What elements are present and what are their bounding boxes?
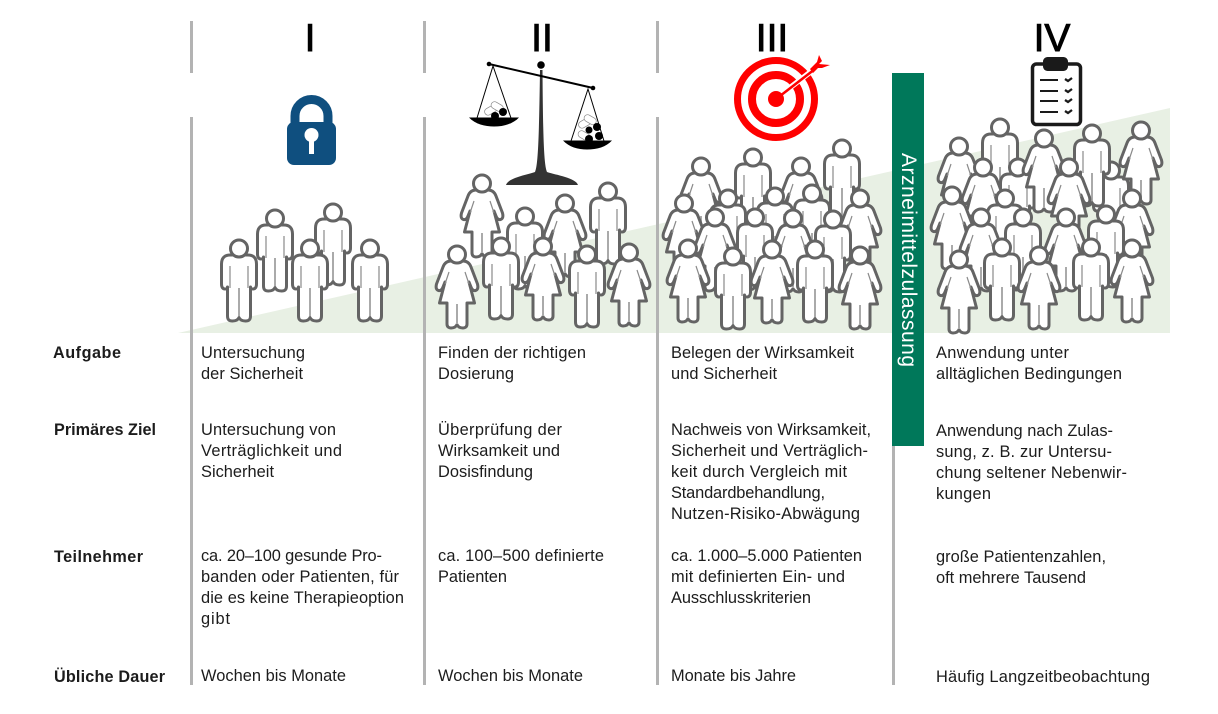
text: phase II column: [438, 344, 604, 685]
text: phase I column: Wochen bis Monate: [201, 667, 346, 685]
text: phase III column: Nachweis von Wirksamkeit,: [671, 421, 871, 439]
heading: phase I: I: [305, 17, 315, 60]
text: phase III column: Standardbehandlung,: [671, 484, 825, 502]
text: phase I column: Verträglichkeit und: [201, 442, 342, 460]
text: phase III column: [671, 344, 871, 685]
crowd: phase III participants: [663, 140, 881, 329]
text: phase I column: [201, 344, 404, 685]
text: phase III column: Monate bis Jahre: [671, 667, 796, 685]
text: phase I column: Untersuchung: [201, 344, 305, 362]
icon: padlock: [287, 100, 336, 165]
row labels: [53, 344, 166, 686]
text: phase I column: die es keine Therapieoption: [201, 589, 404, 607]
row labels: Übliche Dauer: [54, 667, 166, 686]
text: phase II column: Wochen bis Monate: [438, 667, 583, 685]
text: phase III column: mit definierten Ein- und: [671, 568, 845, 586]
text: phase IV column: Anwendung nach Zulas-: [936, 422, 1113, 440]
approval bar: Arzneimittelzulassung: Arzneimittelzulassung: [897, 153, 920, 367]
text: phase I column: der Sicherheit: [201, 365, 303, 383]
text: phase IV column: oft mehrere Tausend: [936, 569, 1086, 587]
icon: clipboard checklist: [1032, 57, 1080, 124]
row labels: Teilnehmer: [54, 548, 144, 566]
text: phase III column: Nutzen-Risiko-Abwägung: [671, 505, 860, 523]
text: phase III column: Belegen der Wirksamkeit: [671, 344, 854, 362]
text: phase II column: Patienten: [438, 568, 507, 586]
text: phase III column: Ausschlusskriterien: [671, 589, 811, 607]
crowd: phase II participants: [436, 175, 650, 328]
text: phase I column: Sicherheit: [201, 463, 274, 481]
text: phase I column: Untersuchung von: [201, 421, 336, 439]
text: phase III column: keit durch Vergleich mit: [671, 463, 847, 481]
text: phase IV column: Häufig Langzeitbeobachtung: [936, 668, 1150, 686]
row labels: Aufgabe: [53, 344, 121, 362]
icon: balance scale with pills: [469, 61, 612, 185]
text: phase II column: Überprüfung der: [438, 421, 563, 439]
text: phase I column: ca. 20–100 gesunde Pro-: [201, 547, 382, 565]
text: phase III column: und Sicherheit: [671, 365, 777, 383]
text: phase IV column: chung seltener Nebenwir-: [936, 464, 1127, 482]
text: phase I column: gibt: [201, 610, 230, 628]
icon: target with arrow: [738, 55, 830, 138]
text: phase II column: Finden der richtigen: [438, 344, 586, 362]
heading: phase III: III: [756, 17, 788, 60]
text: phase IV column: Anwendung unter: [936, 344, 1070, 362]
text: phase IV column: große Patientenzahlen,: [936, 548, 1106, 566]
approval bar: Arzneimittelzulassung: [892, 73, 924, 446]
text: phase III column: Sicherheit und Verträglich-: [671, 442, 868, 460]
text: phase II column: Dosierung: [438, 365, 514, 383]
text: phase IV column: [936, 344, 1150, 686]
text: phase III column: ca. 1.000–5.000 Patienten: [671, 547, 862, 565]
text: phase II column: Dosisfindung: [438, 463, 533, 481]
text: phase IV column: sung, z. B. zur Untersu-: [936, 443, 1112, 461]
crowd: phase IV participants: [931, 119, 1162, 333]
text: phase IV column: alltäglichen Bedingungen: [936, 365, 1122, 383]
heading: phase IV: IV: [1034, 17, 1070, 60]
background wedge: rising patient numbers: [178, 108, 1170, 333]
heading: phase II: II: [531, 17, 553, 60]
column divider lines: [190, 21, 895, 685]
crowd: phase I participants: [222, 204, 388, 321]
text: phase II column: ca. 100–500 definierte: [438, 547, 604, 565]
text: phase I column: banden oder Patienten, für: [201, 568, 400, 586]
text: phase II column: Wirksamkeit und: [438, 442, 560, 460]
row labels: Primäres Ziel: [54, 421, 156, 439]
text: phase IV column: kungen: [936, 485, 991, 503]
